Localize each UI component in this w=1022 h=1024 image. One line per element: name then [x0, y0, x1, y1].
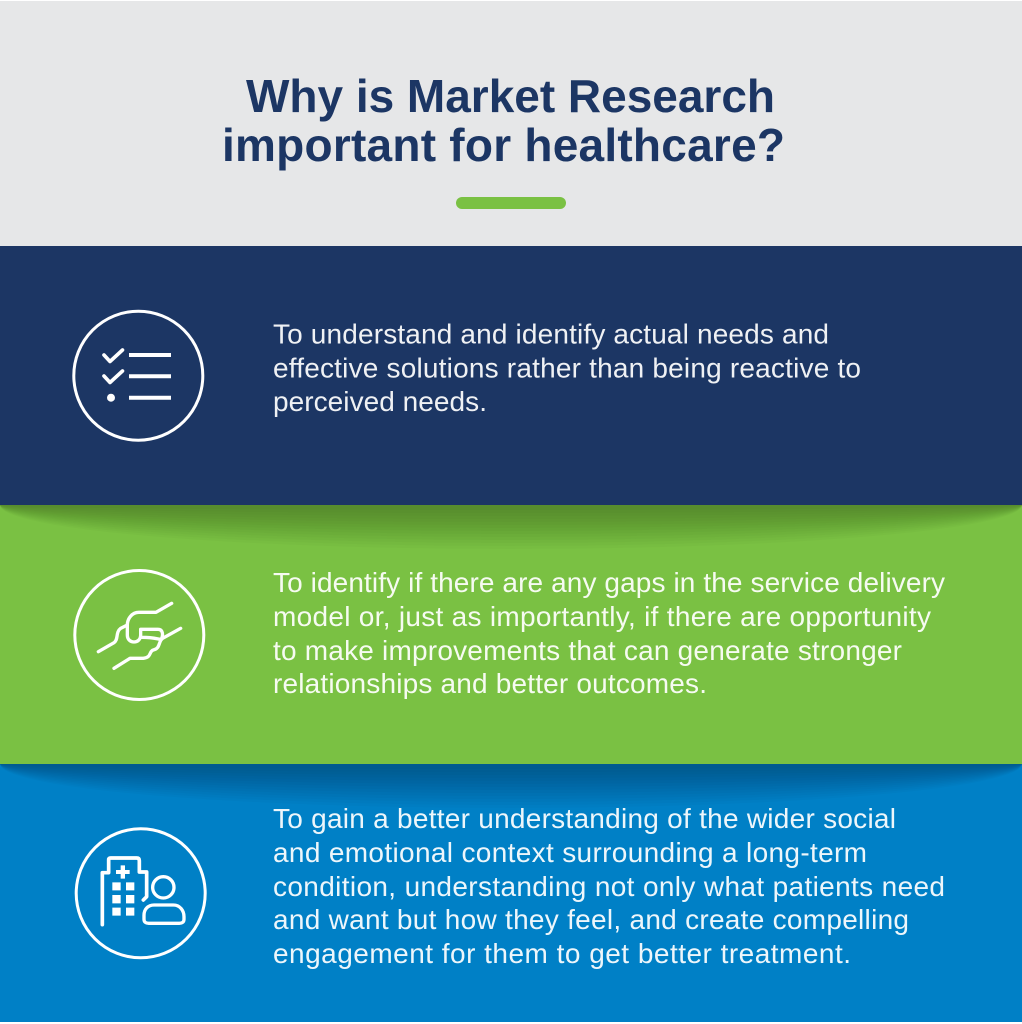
- icon: hospital and patient: [76, 829, 205, 958]
- icon: handshake: [75, 570, 204, 700]
- icon: checklist: [74, 311, 203, 440]
- text: patient context: and emotional context surrounding a long-term: [273, 837, 867, 868]
- text: service gaps: To identify if there are any gaps in the service delivery: [273, 567, 945, 598]
- panel: actual needs: [0, 246, 1022, 505]
- text: actual needs: To understand and identify actual needs and: [273, 318, 829, 350]
- panel: service gaps: [0, 505, 1022, 764]
- text: service gaps: [273, 567, 945, 699]
- title: important for healthcare?: [222, 119, 785, 171]
- title: Why is Market Research: [246, 70, 775, 122]
- green accent bar: [456, 197, 566, 209]
- panel shadow: green: [0, 505, 1022, 549]
- text: service gaps: relationships and better outcomes.: [273, 668, 707, 699]
- title: [222, 70, 785, 171]
- text: patient context: To gain a better understanding of the wider social: [273, 803, 896, 834]
- panel shadow: blue: [0, 764, 1022, 808]
- text: patient context: condition, understanding not only what patients need: [273, 871, 945, 902]
- text: patient context: [273, 803, 945, 969]
- text: actual needs: [273, 318, 861, 417]
- panel: patient context: [0, 764, 1022, 1022]
- text: service gaps: model or, just as importantly, if there are opportunity: [273, 601, 931, 632]
- panel: header: [0, 1, 1022, 246]
- text: actual needs: effective solutions rather than being reactive to: [273, 352, 861, 384]
- text: patient context: and want but how they feel, and create compelling: [273, 904, 909, 935]
- text: patient context: engagement for them to get better treatment.: [273, 938, 851, 969]
- text: service gaps: to make improvements that can generate stronger: [273, 635, 902, 666]
- text: actual needs: perceived needs.: [273, 386, 487, 417]
